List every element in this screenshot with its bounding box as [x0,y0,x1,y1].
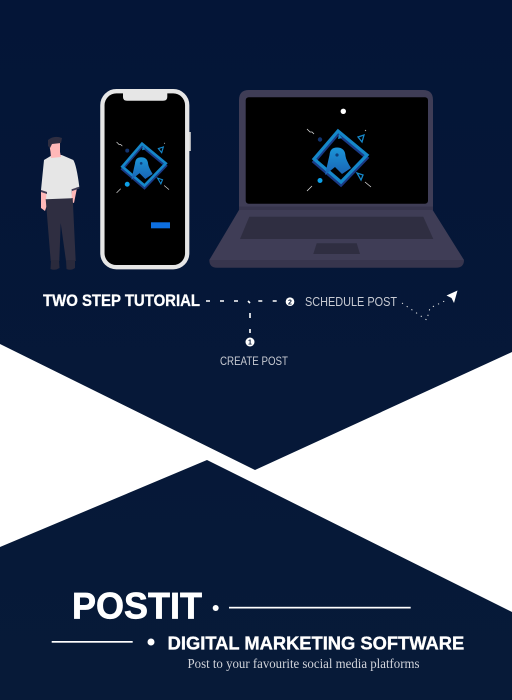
title: POSTIT: POSTIT [72,586,202,626]
icon: paper plane [446,290,458,303]
logo pin [325,148,351,175]
neck and face [49,142,61,158]
phone button [151,222,170,228]
tutorial dashed connector [206,301,277,333]
phone logo [117,142,169,193]
tagline: Post to your favourite social media platforms [188,657,420,672]
illustration: phone [102,90,191,267]
laptop lid [239,90,433,210]
laptop screen [246,97,428,204]
phone notch [123,90,167,101]
shoes [50,260,75,270]
logo accents [125,182,130,187]
phone body [102,91,187,267]
illustration: laptop [209,90,464,268]
laptop hinge shade [239,206,433,210]
step 2 marker: 2 [288,299,292,306]
title dot [213,605,219,611]
title line [229,607,411,608]
subtitle line [52,641,133,643]
logo accents [318,178,322,183]
laptop logo [307,129,371,191]
right hand [71,188,77,203]
subtitle dot [148,638,154,646]
dotted flight path [402,300,447,320]
step 1 marker: 1 [248,340,252,347]
shirt cuffs [41,187,80,194]
subtitle: digital marketing software: DIGITAL MARKETING SOFTWARE [168,634,464,654]
laptop base [209,210,464,260]
laptop keyboard [240,217,433,239]
logo diamond [122,146,166,188]
logo diamond [314,134,367,185]
step 1 marker [246,338,254,347]
label: create post: CREATE POST [220,354,289,368]
label: schedule post: SCHEDULE POST [305,295,397,309]
heading: two step tutorial: TWO STEP TUTORIAL [43,292,200,310]
left arm [41,190,47,211]
step 2 marker [286,297,294,306]
logo pin [131,157,153,180]
illustration: standing person [41,137,80,270]
white diagonal band [0,344,512,612]
laptop trackpad [313,243,360,254]
trousers [46,198,76,261]
laptop lip [209,260,464,268]
phone side button [188,132,191,151]
shirt [41,155,79,199]
hair [48,137,62,148]
laptop camera dot [341,109,346,114]
